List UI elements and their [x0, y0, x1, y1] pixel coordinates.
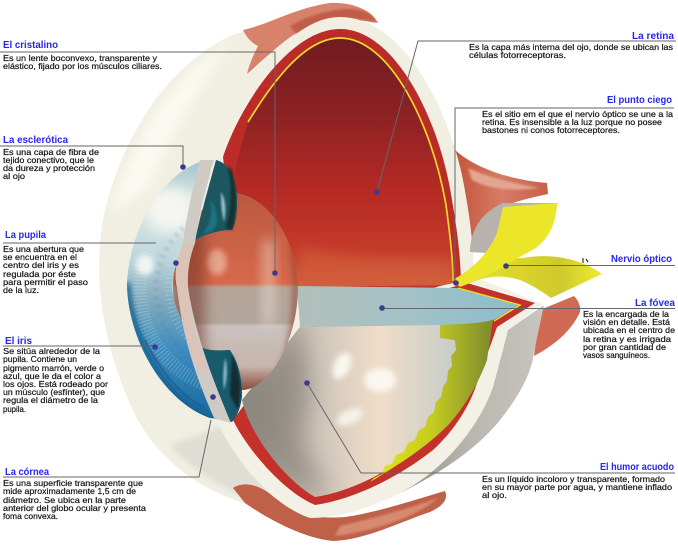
retina: yellow line [248, 38, 453, 281]
label: La pupila [3, 229, 179, 295]
label: El punto ciego: El punto ciego [607, 94, 672, 106]
sclera rim: upper cut [212, 17, 474, 292]
cornea: transparent strip [176, 160, 231, 423]
chamber: aqueous humor lower [242, 322, 492, 497]
label: La fóvea: La fóvea [635, 297, 675, 309]
label: El iris: pupila. Contiene un [3, 354, 77, 364]
label: La córnea: La córnea [5, 466, 49, 478]
ciliary muscle: upper teal [195, 160, 237, 240]
label: La córnea [3, 394, 216, 521]
choroid: lower red band [233, 283, 535, 505]
label: La córnea: anterior del globo ocular y presenta [3, 503, 146, 513]
label: La esclerótica: da dureza y protección [3, 163, 95, 173]
chamber: shading and highlights [242, 327, 396, 497]
label: El iris: azul, que le da el color a [3, 371, 101, 381]
label: El iris [3, 335, 158, 414]
label: La córnea: foma convexa. [3, 511, 58, 521]
label: El punto ciego [453, 94, 674, 286]
label: El humor acuodo: al ojo. [482, 490, 507, 500]
label: El punto ciego: retina. Es insensible a la luz porque no posee [482, 117, 662, 127]
label: El iris: El iris [5, 335, 32, 347]
label: El cristalino: elástico, fijado por los músculos ciliares. [3, 61, 162, 71]
illustration: eye cross-section [99, 3, 602, 541]
label: La pupila: para permitir el paso [3, 277, 88, 287]
label: La retina: células fotorreceptoras. [469, 50, 566, 60]
label: El iris: los ojos. Está rodeado por [3, 379, 108, 389]
label: El iris: pigmento marrón, verde o [3, 363, 104, 373]
label: El humor acuodo: Es un líquido incoloro y transparente, formado [482, 474, 665, 484]
label: La fóvea: visión en detalle. Está [583, 317, 670, 327]
label: El humor acuodo [304, 380, 675, 500]
label: La esclerótica: tejido conectivo, que le [3, 155, 94, 165]
retina: lower yellow serrated band [370, 320, 493, 482]
label: El iris: Se sitúa alrededor de la [3, 346, 100, 356]
label: La pupila: centro del iris y es [3, 260, 79, 270]
label: El punto ciego: bastones ni conos fotorreceptores. [482, 125, 620, 135]
label: La córnea: mide aproximadamente 1,5 cm de [3, 486, 136, 496]
sclera section: lower cream band [218, 278, 543, 518]
muscle: lower right [534, 296, 580, 356]
label: La fóvea [379, 297, 675, 360]
choroid: upper red layer [223, 29, 461, 288]
optic nerve: upper flap and neck [454, 203, 557, 287]
label: La pupila: Es una abertura que [3, 244, 84, 254]
label: La fóvea: vasos sanguíneos. [583, 350, 650, 360]
label: La fóvea: Es la encargada de la [583, 309, 669, 319]
label: El humor acuodo: en su mayor parte por agua, y mantiene inflado [482, 482, 672, 492]
label: El iris: pupila. [3, 404, 26, 414]
label: La fóvea: la retina y es irrigada [583, 334, 671, 344]
label: El iris: un músculo (esfínter), que [3, 387, 105, 397]
label: La córnea: diámetro. Se ubica en la parte [3, 495, 126, 505]
outer sphere: grey lower right [385, 305, 544, 500]
label: El cristalino [0, 39, 278, 276]
muscle: bottom [233, 484, 446, 541]
label: La pupila: se encuentra en el [3, 252, 77, 262]
sheath: grey optic nerve sheath [470, 203, 558, 255]
label: La esclerótica: Es una capa de fibra de [3, 147, 99, 157]
label: La esclerótica [0, 134, 186, 181]
label: El cristalino: El cristalino [3, 39, 58, 51]
label: Nervio óptico: Nervio óptico [611, 253, 672, 265]
label: La esclerótica: al ojo [3, 171, 25, 181]
muscle: upper right [455, 150, 548, 262]
label: La retina: La retina [632, 30, 674, 42]
lens [173, 193, 300, 390]
label: El iris: regula el diámetro de la [3, 395, 98, 405]
ciliary muscle: lower teal [200, 347, 242, 422]
label: La fóvea: ubicada en el centro de [583, 325, 675, 335]
vitreous section: blue slab [297, 286, 518, 327]
label: El punto ciego: Es el sitio em el que el nervio óptico se une a la [482, 109, 673, 119]
label: Nervio óptico [503, 253, 675, 269]
label: La pupila: de la luz. [3, 285, 39, 295]
muscle: top [243, 3, 378, 74]
retina: yellow edge along slab [458, 288, 520, 321]
label: La pupila: regulada por éste [3, 269, 76, 279]
upper chamber: vitreous interior [230, 38, 453, 288]
label: La córnea: Es una superficie transparente que [3, 478, 143, 488]
iris [127, 162, 218, 419]
label: La retina [374, 30, 676, 195]
label: La retina: Es la capa más interna del ojo, donde se ubican las [469, 42, 673, 52]
optic nerve: lower lobe [462, 256, 602, 298]
label: La pupila: La pupila [5, 229, 46, 241]
highlight: orange glow near bottom [298, 245, 452, 285]
outer sphere: sclera surface [99, 17, 340, 518]
label: La esclerótica: La esclerótica [3, 134, 68, 146]
optic nerve: small mark [583, 258, 588, 263]
label: El cristalino: Es un lente boconvexo, transparente y [3, 53, 158, 63]
label: La fóvea: por gran cantidad de [583, 342, 666, 352]
